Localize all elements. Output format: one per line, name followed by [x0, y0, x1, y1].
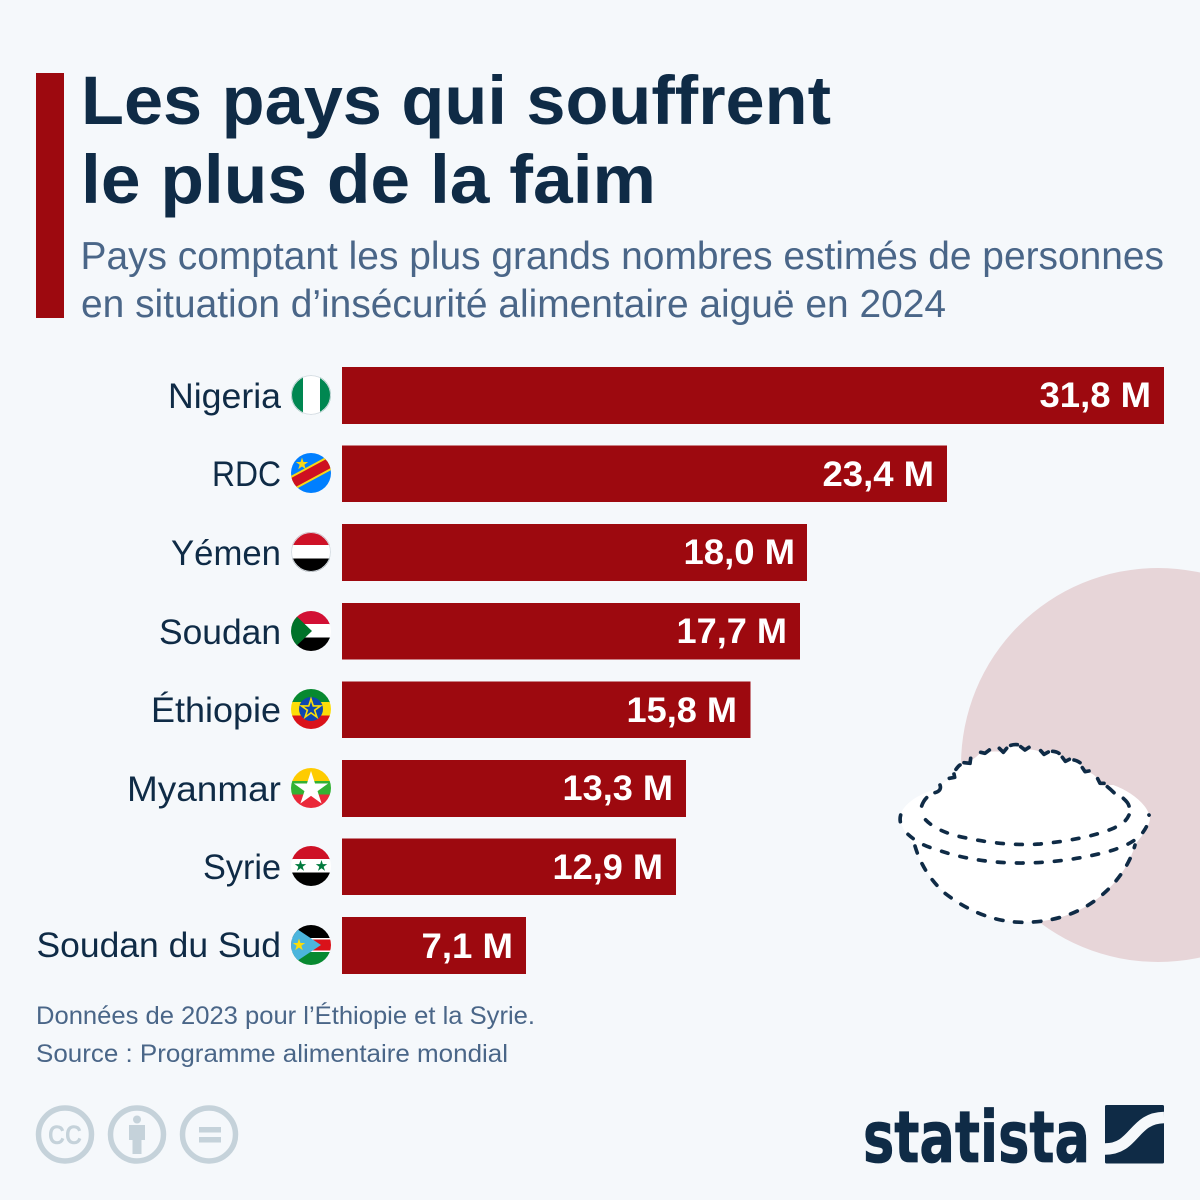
flag: Yémen	[291, 532, 331, 572]
title: le plus de la faim	[81, 141, 656, 218]
row: Yémen: Yémen	[171, 534, 281, 573]
row: RDC: 23,4 M	[822, 455, 934, 494]
decorative pink circle	[961, 568, 1200, 962]
row: Myanmar: Myanmar	[127, 770, 281, 809]
row: Yémen	[171, 524, 807, 581]
row: Nigeria: 31,8 M	[1040, 376, 1151, 415]
row: Soudan du Sud: 7,1 M	[422, 927, 513, 966]
row: Yémen: 18,0 M	[684, 533, 795, 572]
logo: statista mark	[1105, 1105, 1164, 1164]
icon: rice bowl	[900, 745, 1150, 922]
title: Les pays qui souffrent	[81, 62, 831, 139]
subtitle	[80, 235, 1164, 326]
icon: no derivatives	[182, 1108, 236, 1161]
flag: Soudan	[291, 611, 331, 652]
row: Myanmar	[127, 760, 686, 817]
row: Myanmar: 13,3 M	[562, 769, 673, 808]
row: Syrie	[203, 838, 676, 895]
flag: Soudan du Sud	[291, 925, 331, 965]
flag: Myanmar	[291, 768, 331, 808]
flag: RDC	[291, 453, 331, 493]
flag: Éthiopie	[291, 689, 331, 730]
footnote and source: Source : Programme alimentaire mondial	[36, 1040, 508, 1068]
icon: creative commons: CC	[48, 1120, 82, 1150]
logo: statista wordmark: statista	[863, 1096, 1090, 1179]
row: Nigeria	[168, 367, 1164, 424]
row: Éthiopie	[151, 682, 750, 738]
row: Syrie: 12,9 M	[552, 848, 663, 887]
row: Soudan du Sud	[36, 917, 526, 974]
footnote and source: Données de 2023 pour l’Éthiopie et la Syrie.	[36, 1001, 535, 1030]
row: Éthiopie: 15,8 M	[626, 691, 737, 730]
icon: creative commons	[38, 1108, 92, 1161]
row: Éthiopie: Éthiopie	[151, 691, 281, 730]
row: Syrie: Syrie	[203, 848, 281, 887]
icon: attribution	[110, 1108, 164, 1161]
subtitle: Pays comptant les plus grands nombres estimés de personnes	[80, 235, 1164, 278]
row: Soudan: Soudan	[159, 613, 281, 652]
row: RDC	[212, 446, 947, 502]
row: Soudan du Sud: Soudan du Sud	[36, 926, 281, 965]
row: RDC: RDC	[212, 455, 281, 494]
flag: Nigeria	[291, 375, 331, 415]
title	[81, 62, 831, 218]
row: Soudan	[159, 603, 800, 660]
row: Soudan: 17,7 M	[676, 612, 787, 651]
footnote and source	[36, 1001, 535, 1068]
row: Nigeria: Nigeria	[168, 377, 282, 416]
accent bar	[36, 73, 64, 318]
subtitle: en situation d’insécurité alimentaire aiguë en 2024	[81, 283, 946, 326]
flag: Syrie	[291, 846, 331, 886]
